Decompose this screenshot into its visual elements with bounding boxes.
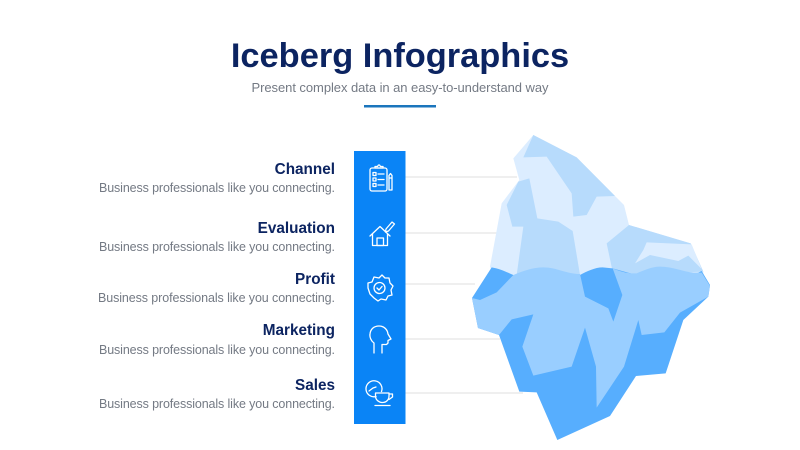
blue icon panel <box>354 151 406 424</box>
iceberg: upper ice body <box>490 135 703 275</box>
label: Channel <box>99 161 335 195</box>
title underline <box>364 105 436 108</box>
label: Profit: Profit <box>295 271 335 288</box>
iceberg: submerged light facets <box>472 267 710 408</box>
label: Evaluation: Business professionals like you connecting. <box>99 240 335 254</box>
icon: head profile <box>370 326 391 353</box>
label: Sales <box>99 377 335 411</box>
connector lines <box>405 176 523 394</box>
iceberg: highlight facet <box>635 242 702 269</box>
label: Profit <box>98 271 335 305</box>
label: Channel: Channel <box>275 161 335 178</box>
icon: house with pencil <box>370 222 394 246</box>
label: Evaluation <box>99 220 335 254</box>
label: Marketing: Marketing <box>263 322 335 339</box>
label: Channel: Business professionals like you connecting. <box>99 181 335 195</box>
label: Marketing <box>99 322 335 357</box>
icon: coffee cup and clock <box>366 381 392 406</box>
iceberg: submerged dark body <box>472 267 710 440</box>
icon: clipboard checklist <box>370 165 392 191</box>
iceberg: upper shaded facet top <box>523 135 615 217</box>
iceberg: upper shaded facet left <box>507 178 580 275</box>
label: Sales: Sales <box>295 377 335 394</box>
label: Profit: Business professionals like you connecting. <box>98 291 335 305</box>
icon: gear with check <box>368 275 393 301</box>
label: Evaluation: Evaluation <box>258 220 335 237</box>
label: Sales: Business professionals like you connecting. <box>99 397 335 411</box>
title: Iceberg Infographics <box>231 37 569 75</box>
label: Marketing: Business professionals like you connecting. <box>99 343 335 357</box>
iceberg: upper shaded facet right <box>607 225 703 275</box>
iceberg illustration <box>472 135 710 440</box>
subtitle: Present complex data in an easy-to-understand way <box>252 80 549 95</box>
